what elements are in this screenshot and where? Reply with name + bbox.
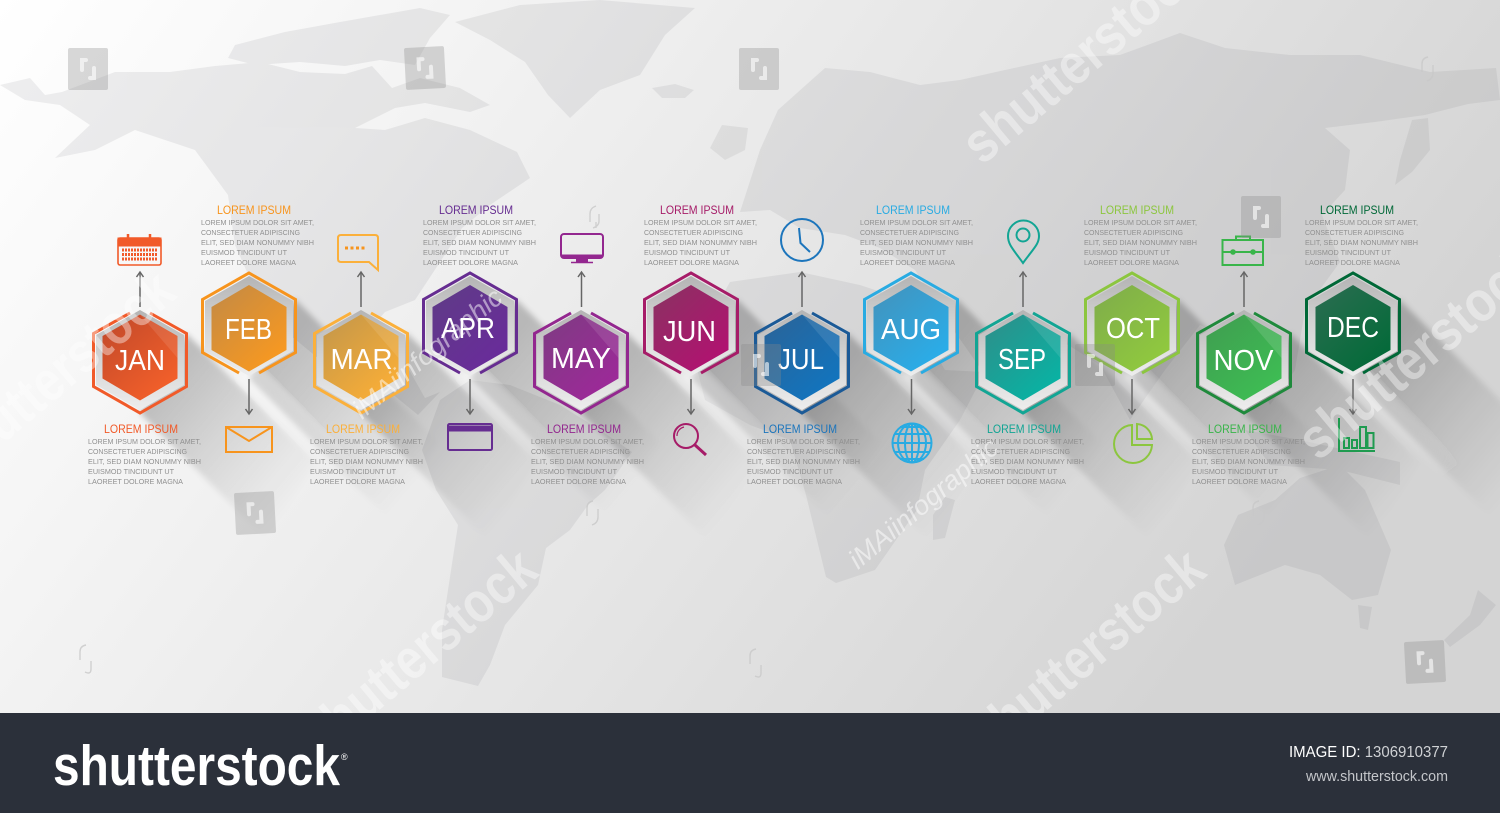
text block: JUN: LOREM IPSUM xyxy=(660,205,734,217)
watermark: contributor text xyxy=(347,282,1005,575)
text block: JUL: LOREM IPSUM xyxy=(763,424,837,436)
watermark: logo squares xyxy=(68,46,1446,684)
month label: OCT: OCT xyxy=(1106,313,1160,345)
arrow: FEB down xyxy=(246,379,252,414)
arrow: JUL up xyxy=(798,272,806,307)
panel: december xyxy=(1305,205,1418,451)
text block: APR: ELIT, SED DIAM NONUMMY NIBH xyxy=(423,238,536,247)
panel: january xyxy=(88,234,201,486)
arrow: OCT down xyxy=(1128,379,1136,414)
icon: monitor xyxy=(561,234,603,262)
text block: JUL: ELIT, SED DIAM NONUMMY NIBH xyxy=(747,457,860,466)
panel: july xyxy=(747,219,860,486)
map: indonesia xyxy=(1245,430,1400,485)
text block: SEP: ELIT, SED DIAM NONUMMY NIBH xyxy=(971,457,1084,466)
hexagon: DEC xyxy=(1306,273,1400,376)
text block: NOV: ELIT, SED DIAM NONUMMY NIBH xyxy=(1192,457,1305,466)
text block: JUL: LAOREET DOLORE MAGNA xyxy=(747,477,843,486)
panel: march xyxy=(310,235,423,486)
text block: MAY: EUISMOD TINCIDUNT UT xyxy=(531,467,617,476)
text block: AUG: EUISMOD TINCIDUNT UT xyxy=(860,248,946,257)
text block: MAR: LOREM IPSUM DOLOR SIT AMET, xyxy=(310,437,423,446)
arrow: JUN down xyxy=(688,379,694,414)
hexagon: JUN xyxy=(644,273,738,376)
text block: MAR: CONSECTETUER ADIPISCING xyxy=(310,447,409,456)
map: greenland xyxy=(455,0,695,118)
map: tasmania xyxy=(1358,605,1372,630)
watermark: contributor text: iMAiinfographic xyxy=(843,432,1005,575)
month label: SEP: SEP xyxy=(998,344,1046,376)
watermark: shutterstock text: shutterstock xyxy=(957,536,1217,768)
text block: JUL: CONSECTETUER ADIPISCING xyxy=(747,447,846,456)
text block: AUG: LOREM IPSUM xyxy=(876,205,950,217)
text block: NOV: LOREM IPSUM DOLOR SIT AMET, xyxy=(1192,437,1305,446)
text block: MAY xyxy=(531,424,644,486)
text block: APR xyxy=(423,205,536,267)
text block: JAN: ELIT, SED DIAM NONUMMY NIBH xyxy=(88,457,201,466)
text block: MAR: ELIT, SED DIAM NONUMMY NIBH xyxy=(310,457,423,466)
icon: briefcase xyxy=(1222,236,1263,265)
map: north america xyxy=(0,62,530,415)
text block: NOV: EUISMOD TINCIDUNT UT xyxy=(1192,467,1278,476)
month label: FEB: FEB xyxy=(225,314,272,346)
watermark: outline logos xyxy=(80,57,1433,677)
map: australia xyxy=(1224,465,1391,600)
text block: SEP: LAOREET DOLORE MAGNA xyxy=(971,477,1067,486)
text block: SEP: LOREM IPSUM DOLOR SIT AMET, xyxy=(971,437,1084,446)
hexagon: MAR xyxy=(314,310,408,413)
text block: JUL: EUISMOD TINCIDUNT UT xyxy=(747,467,833,476)
footer logo: shutterstock xyxy=(53,734,340,798)
text block: OCT: ELIT, SED DIAM NONUMMY NIBH xyxy=(1084,238,1197,247)
hexagon: NOV xyxy=(1198,310,1290,413)
text block: JAN xyxy=(88,424,201,486)
image id: IMAGE ID: 1306910377 xyxy=(1289,744,1448,761)
map: new zealand xyxy=(1444,590,1496,647)
arrow: NOV up xyxy=(1240,272,1248,307)
arrow: JAN up xyxy=(136,272,144,307)
map: iceland xyxy=(652,84,694,98)
month label: APR: APR xyxy=(441,313,495,345)
text block: AUG: ELIT, SED DIAM NONUMMY NIBH xyxy=(860,238,973,247)
arrow: APR down xyxy=(466,379,474,414)
text block: DEC: CONSECTETUER ADIPISCING xyxy=(1305,228,1404,237)
text block: JAN: CONSECTETUER ADIPISCING xyxy=(88,447,187,456)
map: africa xyxy=(692,272,985,583)
text block: DEC: LAOREET DOLORE MAGNA xyxy=(1305,258,1401,267)
text block: SEP xyxy=(971,424,1084,486)
panel: september xyxy=(971,220,1084,486)
text block: APR: LOREM IPSUM xyxy=(439,205,513,217)
map: arctic islands xyxy=(228,8,450,66)
map: britain xyxy=(710,125,748,160)
text block: DEC xyxy=(1305,205,1418,267)
text block: FEB: LOREM IPSUM DOLOR SIT AMET, xyxy=(201,218,314,227)
website: www.shutterstock.com xyxy=(1305,768,1448,785)
arrow: DEC down xyxy=(1350,379,1356,414)
hexagon: APR xyxy=(424,273,516,376)
text block: OCT: EUISMOD TINCIDUNT UT xyxy=(1084,248,1170,257)
text block: FEB: EUISMOD TINCIDUNT UT xyxy=(201,248,287,257)
month label: MAY: MAY xyxy=(551,343,611,375)
icon: location pin xyxy=(1008,220,1039,263)
text block: NOV xyxy=(1192,424,1305,486)
icon: envelope xyxy=(226,427,272,452)
text block: MAY: ELIT, SED DIAM NONUMMY NIBH xyxy=(531,457,644,466)
month label: DEC: DEC xyxy=(1327,312,1379,344)
watermark: shutterstock text: shutterstock xyxy=(289,536,549,768)
month label: MAR: MAR xyxy=(330,344,392,376)
text block: MAY: LOREM IPSUM xyxy=(547,424,621,436)
long shadows xyxy=(140,299,1500,542)
text block: AUG: LOREM IPSUM DOLOR SIT AMET, xyxy=(860,218,973,227)
map: japan xyxy=(1395,118,1430,185)
icon: magnifier xyxy=(674,424,706,455)
text block: MAR: EUISMOD TINCIDUNT UT xyxy=(310,467,396,476)
arrow: SEP up xyxy=(1020,272,1026,307)
hexagon: SEP xyxy=(976,310,1070,413)
text block: OCT: LOREM IPSUM DOLOR SIT AMET, xyxy=(1084,218,1197,227)
text block: DEC: LOREM IPSUM DOLOR SIT AMET, xyxy=(1305,218,1418,227)
text block: FEB xyxy=(201,205,314,267)
map: eurasia xyxy=(740,33,1500,420)
month label: JUL: JUL xyxy=(778,344,824,376)
text block: MAY: LAOREET DOLORE MAGNA xyxy=(531,477,627,486)
text block: NOV: LAOREET DOLORE MAGNA xyxy=(1192,477,1288,486)
hexagon: MAY xyxy=(534,310,628,413)
text block: NOV: LOREM IPSUM xyxy=(1208,424,1282,436)
text block: JAN: LOREM IPSUM DOLOR SIT AMET, xyxy=(88,437,201,446)
text block: JUL: LOREM IPSUM DOLOR SIT AMET, xyxy=(747,437,860,446)
panel: august xyxy=(860,205,973,462)
arrow: AUG down xyxy=(908,379,915,414)
text block: NOV: CONSECTETUER ADIPISCING xyxy=(1192,447,1291,456)
text block: MAY: CONSECTETUER ADIPISCING xyxy=(531,447,630,456)
map: madagascar xyxy=(933,497,955,540)
text block: FEB: LOREM IPSUM xyxy=(217,205,291,217)
panel: may xyxy=(531,234,644,486)
text block: APR: LAOREET DOLORE MAGNA xyxy=(423,258,519,267)
watermark: contributor text: iMAiinfographic xyxy=(347,282,509,425)
text block: JUN: LOREM IPSUM DOLOR SIT AMET, xyxy=(644,218,757,227)
text block: JUN: LAOREET DOLORE MAGNA xyxy=(644,258,740,267)
text block: FEB: CONSECTETUER ADIPISCING xyxy=(201,228,300,237)
footer bar xyxy=(0,713,1500,813)
map: south america xyxy=(422,380,632,686)
text block: SEP: CONSECTETUER ADIPISCING xyxy=(971,447,1070,456)
text block: AUG: LAOREET DOLORE MAGNA xyxy=(860,258,956,267)
hexagon: FEB xyxy=(202,273,296,376)
text block: DEC: ELIT, SED DIAM NONUMMY NIBH xyxy=(1305,238,1418,247)
text block: OCT xyxy=(1084,205,1197,267)
text block: MAY: LOREM IPSUM DOLOR SIT AMET, xyxy=(531,437,644,446)
text block: FEB: LAOREET DOLORE MAGNA xyxy=(201,258,297,267)
text block: JAN: LAOREET DOLORE MAGNA xyxy=(88,477,184,486)
icon: chat bubble xyxy=(338,235,378,270)
icon: bar chart xyxy=(1339,418,1375,451)
hexagon: OCT xyxy=(1086,273,1178,376)
icon: clock xyxy=(781,219,823,261)
text block: OCT: LOREM IPSUM xyxy=(1100,205,1174,217)
text block: OCT: CONSECTETUER ADIPISCING xyxy=(1084,228,1183,237)
text block: OCT: LAOREET DOLORE MAGNA xyxy=(1084,258,1180,267)
text block: MAR: LAOREET DOLORE MAGNA xyxy=(310,477,406,486)
text block: MAR: LOREM IPSUM xyxy=(326,424,400,436)
text block: APR: CONSECTETUER ADIPISCING xyxy=(423,228,522,237)
text block: JUN xyxy=(644,205,757,267)
panel: february xyxy=(201,205,314,452)
text block: FEB: ELIT, SED DIAM NONUMMY NIBH xyxy=(201,238,314,247)
icon: calendar xyxy=(118,234,161,265)
text block: APR: EUISMOD TINCIDUNT UT xyxy=(423,248,509,257)
text block: MAR xyxy=(310,424,423,486)
month label: JUN: JUN xyxy=(663,316,716,348)
text block: SEP: LOREM IPSUM xyxy=(987,424,1061,436)
month label: NOV: NOV xyxy=(1214,345,1274,377)
text block: JAN: LOREM IPSUM xyxy=(104,424,178,436)
panel: november xyxy=(1192,236,1305,486)
text block: AUG xyxy=(860,205,973,267)
text block: DEC: LOREM IPSUM xyxy=(1320,205,1394,217)
hexagon: JUL xyxy=(756,310,848,413)
panel: april xyxy=(423,205,536,450)
text block: APR: LOREM IPSUM DOLOR SIT AMET, xyxy=(423,218,536,227)
text block: SEP: EUISMOD TINCIDUNT UT xyxy=(971,467,1057,476)
month label: AUG: AUG xyxy=(881,314,941,346)
text block: JUL xyxy=(747,424,860,486)
icon: pie chart xyxy=(1114,424,1152,463)
arrow: MAY up xyxy=(578,272,585,307)
registered mark: ® xyxy=(341,752,348,762)
text block: JUN: CONSECTETUER ADIPISCING xyxy=(644,228,743,237)
text block: JAN: EUISMOD TINCIDUNT UT xyxy=(88,467,174,476)
text block: AUG: CONSECTETUER ADIPISCING xyxy=(860,228,959,237)
hexagon: JAN xyxy=(94,310,186,413)
hexagon: AUG xyxy=(864,273,958,376)
panel: june xyxy=(644,205,757,455)
text block: JUN: ELIT, SED DIAM NONUMMY NIBH xyxy=(644,238,757,247)
arrow: MAR up xyxy=(358,272,364,307)
month label: JAN: JAN xyxy=(115,345,165,377)
text block: DEC: EUISMOD TINCIDUNT UT xyxy=(1305,248,1391,257)
icon: globe xyxy=(892,424,932,462)
panel: october xyxy=(1084,205,1197,463)
icon: credit card xyxy=(448,424,492,450)
text block: JUN: EUISMOD TINCIDUNT UT xyxy=(644,248,730,257)
